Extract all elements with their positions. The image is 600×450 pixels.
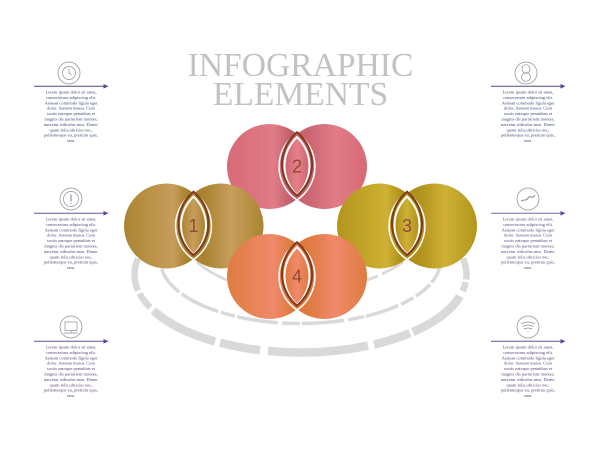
text block: Aenean commodo ligula eget	[45, 100, 98, 105]
text block: sem.	[67, 265, 75, 270]
text block: magnis dis parturient montes,	[44, 244, 98, 250]
panel: top right	[491, 62, 566, 143]
text block: consectetuer adipiscing elit.	[503, 222, 553, 227]
text block: dolor. Aenean massa. Cum	[504, 233, 553, 238]
text block: quam felis,ultricies nec,	[50, 382, 92, 388]
text block: sociis natoque penatibus et	[504, 366, 553, 371]
venn 4	[227, 234, 367, 319]
text block: sem.	[524, 393, 532, 398]
text block: dolor. Aenean massa. Cum	[47, 233, 96, 238]
text block: dolor. Aenean massa. Cum	[47, 361, 96, 366]
text block: consectetuer adipiscing elit.	[46, 222, 96, 227]
text block: sociis natoque penatibus et	[47, 366, 96, 371]
text block: nascetur ridiculus mus. Donec	[44, 122, 98, 127]
text block: Aenean commodo ligula eget	[45, 227, 98, 232]
text block: quam felis,ultricies nec,	[506, 254, 550, 260]
text block: quam felis,ultricies nec,	[506, 382, 550, 388]
icon: wifi	[517, 316, 539, 338]
panel: bottom left	[34, 316, 108, 398]
text block: sociis natoque penatibus et	[47, 238, 96, 243]
text block: sem.	[524, 138, 532, 143]
arrow	[34, 84, 108, 89]
arrow	[491, 339, 566, 344]
text block: Lorem ipsum dolor sit amet,	[502, 90, 554, 96]
text block: consectetuer adipiscing elit.	[503, 95, 553, 100]
text block: dolor. Aenean massa. Cum	[504, 106, 553, 111]
text block: pellentesque eu, pretium quis,	[44, 260, 98, 266]
arrow	[34, 339, 108, 344]
text block: sem.	[67, 393, 75, 398]
icon: exclamation	[60, 188, 82, 210]
arrow	[491, 84, 566, 89]
title: ELEMENTS	[213, 76, 388, 113]
venn 1: 1	[188, 216, 199, 236]
text block: nascetur ridiculus mus. Donec	[44, 249, 98, 254]
icon: monitor	[60, 316, 82, 338]
text block: magnis dis parturient montes,	[501, 372, 555, 378]
text block: quam felis,ultricies nec,	[50, 254, 92, 260]
venn 3	[337, 184, 477, 268]
text block: dolor. Aenean massa. Cum	[504, 361, 553, 366]
panel: bottom right	[491, 316, 566, 398]
text block: nascetur ridiculus mus. Donec	[501, 377, 555, 382]
text block: Aenean commodo ligula eget	[502, 355, 555, 360]
text block: nascetur ridiculus mus. Donec	[501, 122, 555, 127]
text block: Aenean commodo ligula eget	[45, 355, 98, 360]
text block: magnis dis parturient montes,	[501, 116, 555, 122]
text block: sociis natoque penatibus et	[504, 111, 553, 116]
outer dashed arc	[134, 258, 467, 352]
text block: dolor. Aenean massa. Cum	[47, 106, 96, 111]
middle dashed arc	[162, 266, 440, 324]
icon: hourglass	[515, 62, 537, 84]
icon: chart squiggle	[517, 188, 539, 210]
text block: Lorem ipsum dolor sit amet,	[45, 90, 97, 96]
text block: magnis dis parturient montes,	[501, 244, 555, 250]
icon: clock	[58, 62, 80, 84]
venn 4: 4	[292, 266, 302, 286]
venn 2	[227, 124, 367, 209]
text block: quam felis,ultricies nec,	[50, 127, 92, 133]
text block: nascetur ridiculus mus. Donec	[501, 249, 555, 254]
text block: Aenean commodo ligula eget	[502, 100, 555, 105]
panel: top left	[34, 62, 108, 143]
inner dashed arc	[197, 262, 403, 280]
panel: middle right	[491, 188, 566, 270]
text block: Lorem ipsum dolor sit amet,	[45, 344, 97, 350]
text block: quam felis,ultricies nec,	[506, 127, 550, 133]
text block: Aenean commodo ligula eget	[502, 227, 555, 232]
text block: sem.	[524, 265, 532, 270]
title: INFOGRAPHIC	[188, 47, 413, 84]
text block: sociis natoque penatibus et	[47, 111, 96, 116]
text block: pellentesque eu, pretium quis,	[501, 260, 555, 266]
text block: consectetuer adipiscing elit.	[46, 95, 96, 100]
text block: pellentesque eu, pretium quis,	[501, 388, 555, 394]
text block: consectetuer adipiscing elit.	[46, 350, 96, 355]
text block: pellentesque eu, pretium quis,	[44, 388, 98, 394]
text block: nascetur ridiculus mus. Donec	[44, 377, 98, 382]
arrow	[34, 211, 108, 216]
text block: consectetuer adipiscing elit.	[503, 350, 553, 355]
text block: sociis natoque penatibus et	[504, 238, 553, 243]
text block: Lorem ipsum dolor sit amet,	[502, 344, 554, 350]
panel: middle left	[34, 188, 108, 270]
text block: pellentesque eu, pretium quis,	[44, 133, 98, 139]
venn 2: 2	[292, 156, 302, 176]
venn 1	[124, 184, 264, 268]
title	[188, 47, 413, 113]
text block: magnis dis parturient montes,	[44, 116, 98, 122]
text block: sem.	[67, 138, 75, 143]
venn 3: 3	[402, 216, 412, 236]
text block: magnis dis parturient montes,	[44, 372, 98, 378]
text block: pellentesque eu, pretium quis,	[501, 133, 555, 139]
arrow	[491, 211, 566, 216]
text block: Lorem ipsum dolor sit amet,	[45, 216, 97, 222]
text block: Lorem ipsum dolor sit amet,	[502, 216, 554, 222]
